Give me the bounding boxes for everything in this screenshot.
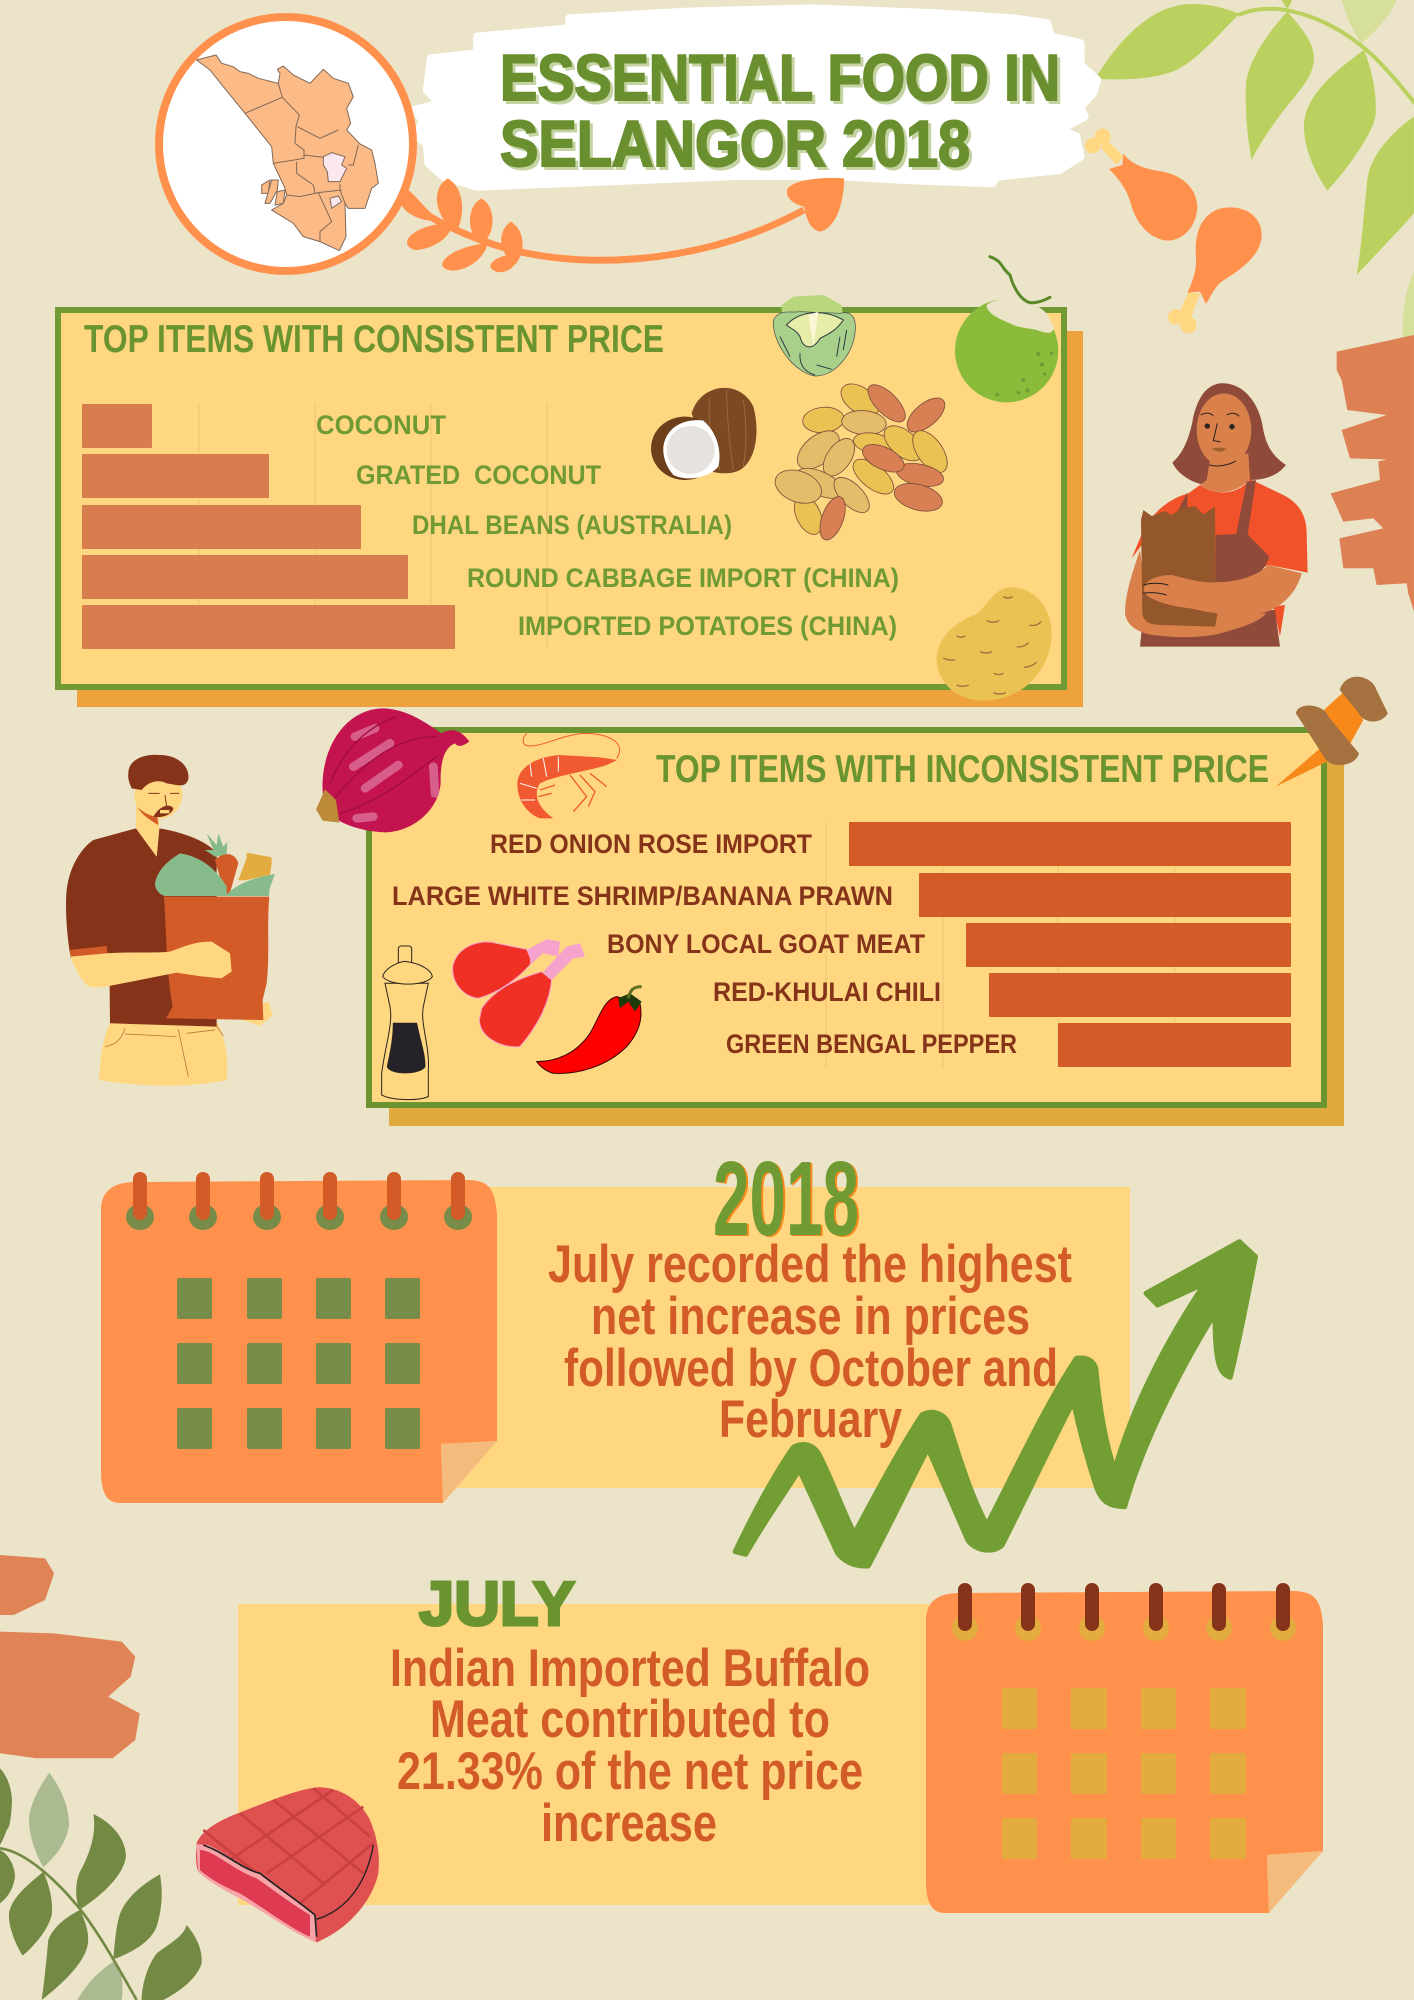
text: Indian imported buffalo meat: 21.33% of the net price	[397, 1742, 863, 1801]
bar labels: inconsistent price items: BONY LOCAL GOAT MEAT	[607, 929, 925, 959]
arrow: sprig from map to title	[399, 178, 844, 272]
decoration: brush strokes left	[0, 1555, 140, 1758]
icon: red onion	[316, 708, 469, 832]
bar labels: inconsistent price items: LARGE WHITE SHRIMP/BANANA PRAWN	[392, 881, 893, 911]
title: ESSENTIAL FOOD IN	[500, 41, 1060, 114]
bar labels: inconsistent price items: GREEN BENGAL PEPPER	[726, 1029, 1017, 1059]
bar labels: consistent price items: COCONUT	[316, 410, 446, 440]
icon: calendar orange with green squares	[101, 1172, 497, 1503]
bar labels: inconsistent price items	[392, 829, 1017, 1059]
title brush background	[414, 8, 1097, 187]
arrow: green zigzag rising	[735, 1242, 1256, 1566]
icon: pepper mill	[382, 946, 432, 1100]
heading: 2018: 2018	[713, 1140, 859, 1258]
text: July highest net increase: followed by October and	[564, 1339, 1058, 1398]
leaves: bottom left upper edge	[0, 1770, 12, 1840]
title: ESSENTIAL FOOD IN	[503, 44, 1063, 117]
heading: consistent price: TOP ITEMS WITH CONSISTENT PRICE	[84, 318, 664, 361]
illustration: woman holding a paper bag	[1125, 383, 1308, 647]
illustration: man holding grocery bag	[66, 755, 275, 1086]
heading: 2018: 2018	[715, 1141, 861, 1259]
icon: raw beef cut	[196, 1787, 379, 1942]
text: July highest net increase: February	[719, 1390, 902, 1449]
panel: top items with inconsistent price	[369, 730, 1344, 1126]
map of Selangor in circle	[159, 17, 413, 271]
text: Indian imported buffalo meat: Meat contributed to	[430, 1690, 830, 1749]
text: July highest net increase	[548, 1235, 1072, 1449]
title: SELANGOR 2018	[503, 110, 973, 183]
icon: calendar orange with yellow squares	[926, 1583, 1323, 1913]
heading: July: JULY	[419, 1570, 575, 1639]
title: SELANGOR 2018	[500, 107, 970, 180]
title	[500, 41, 1063, 183]
icon: orange chicken drumsticks	[1085, 129, 1262, 333]
leaves: bottom left	[0, 1768, 202, 2000]
panel: 2018 highest net increase	[455, 1140, 1130, 1488]
bar labels: consistent price items: DHAL BEANS (AUSTRALIA)	[412, 510, 732, 540]
decoration: brush stroke right	[1331, 335, 1414, 612]
bar labels: consistent price items: IMPORTED POTATOES (CHINA)	[518, 611, 897, 641]
text: July highest net increase: July recorded the highest	[548, 1235, 1072, 1294]
icon: raw chicken legs	[453, 939, 585, 1047]
text: July highest net increase: net increase in prices	[591, 1287, 1030, 1346]
bar labels: consistent price items	[316, 410, 899, 641]
bar labels: inconsistent price items: RED-KHULAI CHILI	[713, 977, 941, 1007]
bar chart: consistent price items	[82, 404, 455, 649]
leaves: top right	[1095, 0, 1414, 340]
icon: cabbage	[773, 295, 855, 376]
text: Indian imported buffalo meat	[390, 1639, 870, 1853]
text: Indian imported buffalo meat: Indian Imported Buffalo	[390, 1639, 870, 1698]
bar chart: inconsistent price items	[849, 822, 1291, 1067]
panel: top items with consistent price	[58, 310, 1083, 707]
icon: dhal beans	[771, 377, 954, 543]
heading: inconsistent price: TOP ITEMS WITH INCONSISTENT PRICE	[656, 748, 1269, 791]
icon: red chili	[537, 987, 642, 1074]
heading: 2018	[713, 1140, 861, 1259]
bar labels: consistent price items: ROUND CABBAGE IMPORT (CHINA)	[467, 563, 899, 593]
icon: potato	[937, 587, 1052, 701]
icon: coconut halves	[651, 388, 757, 480]
icon: green coconut	[955, 257, 1058, 402]
bar labels: consistent price items: GRATED COCONUT	[356, 460, 601, 490]
panel: July buffalo meat	[238, 1570, 929, 1905]
bar labels: inconsistent price items: RED ONION ROSE IMPORT	[490, 829, 812, 859]
icon: shrimp	[517, 733, 620, 818]
icon: pushpin	[1276, 677, 1388, 787]
text: Indian imported buffalo meat: increase	[541, 1794, 717, 1853]
